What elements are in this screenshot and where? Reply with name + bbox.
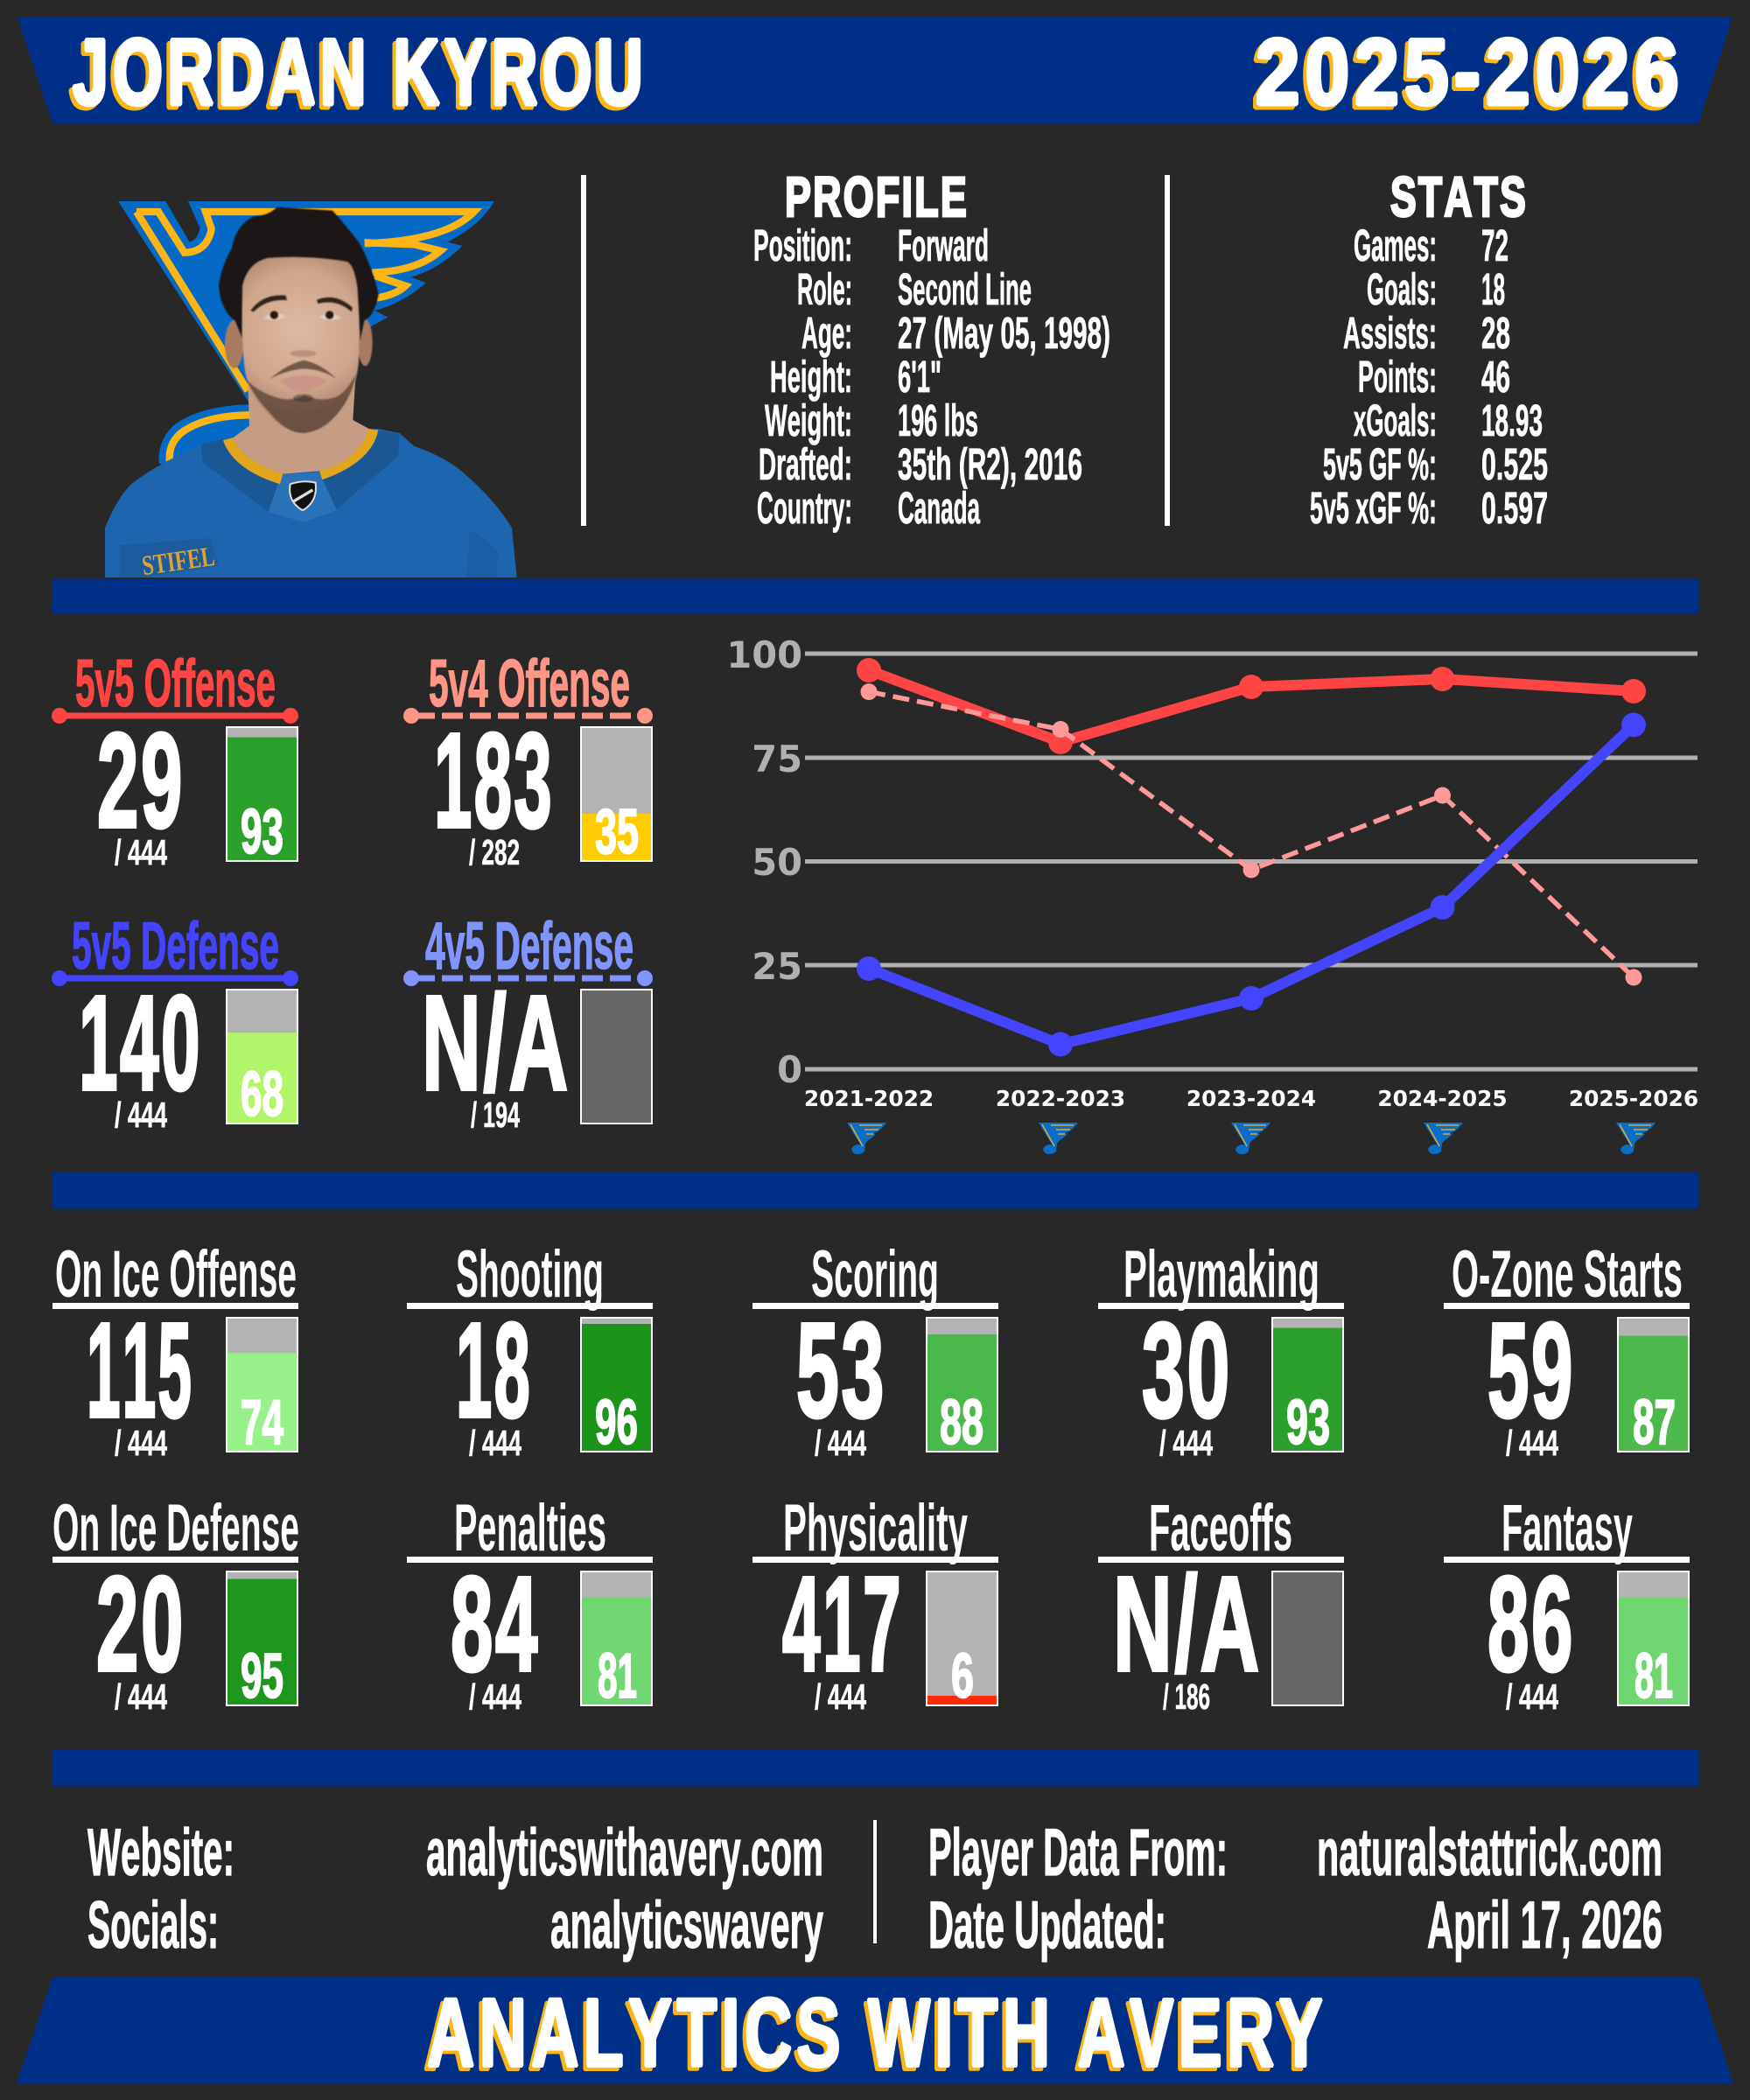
percentile bar: 81 <box>1634 1642 1673 1712</box>
grid lines <box>805 654 1698 1069</box>
x axis labels: 2024-2025 <box>1377 1086 1508 1111</box>
panel: scoring <box>752 1237 998 1463</box>
profile values: Second Line <box>898 264 1032 314</box>
stats labels <box>1310 220 1437 533</box>
neck <box>234 374 369 474</box>
footer info right: Date Updated: <box>928 1888 1166 1963</box>
season: 2025-2026 <box>1256 19 1684 124</box>
panel: stats <box>1310 165 1548 533</box>
percentile bar: 6 <box>951 1642 974 1712</box>
rank total: / 444 <box>815 1423 866 1463</box>
series: 5v5 offense <box>857 658 1646 754</box>
rank: 183 <box>434 705 554 856</box>
panel: penalties <box>407 1491 653 1717</box>
rank: 29 <box>97 705 185 856</box>
panel: fantasy <box>1444 1491 1690 1717</box>
underline <box>1444 1557 1690 1563</box>
profile labels: Age: <box>802 308 852 358</box>
divider <box>581 175 586 526</box>
icon: team logo 2025-2026 <box>1616 1123 1656 1154</box>
stats values: 72 <box>1481 220 1508 270</box>
stats values: 0.525 <box>1481 439 1548 489</box>
title: 5v5 Defense <box>72 909 279 984</box>
divider <box>1165 175 1170 526</box>
footer divider <box>873 1820 877 1943</box>
header banner <box>18 18 1732 128</box>
panel: shooting: 18 <box>456 1295 532 1446</box>
percentile bar: 95 <box>241 1642 284 1712</box>
profile values <box>898 220 1110 533</box>
icon: team logo 2023-2024 <box>1231 1123 1270 1154</box>
percentile bar <box>227 727 298 867</box>
profile values: 27 (May 05, 1998) <box>898 308 1110 358</box>
percentile bar: 87 <box>1633 1388 1676 1458</box>
footer info left: analyticswavery <box>550 1888 823 1963</box>
stats values: 18 <box>1481 264 1505 314</box>
underline <box>52 1303 298 1309</box>
underline <box>1098 1303 1344 1309</box>
brand name: ANALYTICS WITH AVERY <box>424 1983 1324 2090</box>
league shield <box>290 481 316 510</box>
section band <box>52 1172 1698 1208</box>
footer info right: Player Data From: <box>928 1816 1228 1890</box>
series: 5v5 defense <box>857 712 1646 1057</box>
y axis labels: 100 <box>726 634 802 676</box>
rank total: / 282 <box>469 832 520 872</box>
panel: on ice offense <box>52 1237 298 1463</box>
head <box>219 207 379 433</box>
footer info right <box>928 1816 1662 1963</box>
title: Scoring <box>811 1237 939 1312</box>
underline <box>752 1557 998 1563</box>
rank total: / 444 <box>815 1676 866 1717</box>
underline <box>752 1303 998 1309</box>
section band <box>52 578 1698 613</box>
series: 5v4 offense <box>861 683 1642 985</box>
title: 5v5 Offense <box>75 647 276 721</box>
percentile bar: 93 <box>1286 1388 1330 1458</box>
x axis labels: 2022-2023 <box>996 1086 1125 1111</box>
title: 5v4 Offense <box>429 647 630 721</box>
beard <box>247 374 356 433</box>
title: On Ice Offense <box>55 1237 297 1312</box>
hair <box>219 207 379 341</box>
rank total: / 444 <box>1506 1676 1558 1717</box>
rank: 84 <box>451 1549 540 1699</box>
dashed line with end dots <box>403 708 653 724</box>
jersey <box>105 429 517 578</box>
profile values: Canada <box>898 483 980 533</box>
x axis labels: 2025-2026 <box>1569 1086 1698 1111</box>
line with end dots <box>52 970 298 986</box>
rank: 20 <box>96 1549 186 1699</box>
line with end dots <box>52 708 298 724</box>
profile labels: Drafted: <box>759 439 852 489</box>
underline <box>52 1557 298 1563</box>
percentile bar: 81 <box>598 1642 637 1712</box>
percentile bar <box>927 1572 998 1712</box>
stats labels: 5v5 GF %: <box>1323 439 1437 489</box>
player name <box>69 19 648 128</box>
percentile bar: 68 <box>241 1060 284 1130</box>
rank total: / 444 <box>1506 1423 1558 1463</box>
rank total: / 444 <box>115 1423 167 1463</box>
rank total: / 186 <box>1163 1676 1210 1717</box>
y axis labels: 50 <box>752 841 802 884</box>
profile labels: Height: <box>770 352 852 402</box>
percentile bar <box>1618 1318 1689 1458</box>
player name: JORDAN KYROU <box>69 23 644 128</box>
footer info left: Socials: <box>88 1888 219 1963</box>
stats values: 0.597 <box>1481 483 1548 533</box>
y axis labels: 0 <box>777 1048 802 1091</box>
panel: 5v5 defense <box>52 909 298 1135</box>
profile values: 6'1" <box>898 352 942 402</box>
rank: 417 <box>782 1549 903 1699</box>
percentile bar: 88 <box>940 1388 984 1458</box>
y axis labels: 25 <box>752 945 802 988</box>
eyes <box>264 313 341 320</box>
stats values: 18.93 <box>1481 396 1543 445</box>
footer info left: analyticswithavery.com <box>426 1816 823 1890</box>
rank: 86 <box>1488 1549 1575 1699</box>
dashed line with end dots <box>403 970 653 986</box>
title: 4v5 Defense <box>425 909 634 984</box>
underline <box>1098 1557 1344 1563</box>
percentile bar <box>227 1572 298 1712</box>
panel: o-zone starts <box>1444 1237 1690 1463</box>
collar panels <box>201 439 282 512</box>
stats labels: 5v5 xGF %: <box>1310 483 1437 533</box>
percentile bar: 35 <box>595 797 639 867</box>
icon: team logo 2024-2025 <box>1424 1123 1463 1154</box>
stats labels: Goals: <box>1367 264 1437 314</box>
percentile bar <box>227 990 298 1130</box>
brows <box>250 295 353 312</box>
profile values: Forward <box>898 220 989 270</box>
panel: playmaking <box>1098 1237 1344 1463</box>
panel: physicality <box>752 1491 998 1717</box>
profile values: 35th (R2), 2016 <box>898 439 1082 489</box>
brand name: ANALYTICS WITH AVERY <box>427 1979 1327 2087</box>
title: On Ice Defense <box>52 1491 299 1565</box>
rank total: / 444 <box>115 1095 167 1135</box>
line chart <box>726 634 1698 1154</box>
percentile bar <box>1272 1572 1343 1705</box>
percentile bar <box>581 1572 652 1712</box>
rank: 59 <box>1488 1295 1575 1446</box>
section band <box>52 1750 1698 1786</box>
profile labels: Weight: <box>765 396 852 445</box>
profile labels <box>753 220 852 533</box>
profile labels: Position: <box>753 220 852 270</box>
sponsor patch: STIFEL <box>140 540 216 581</box>
y axis labels: 75 <box>752 738 802 780</box>
footer banner <box>17 1978 1733 2090</box>
title: Fantasy <box>1502 1491 1633 1565</box>
rank total: / 444 <box>115 832 167 872</box>
rank: 30 <box>1142 1295 1232 1446</box>
underline <box>1444 1303 1690 1309</box>
player photo <box>105 207 517 581</box>
team logo large <box>118 201 494 464</box>
collar trim <box>223 429 378 484</box>
rank total: / 444 <box>469 1676 522 1717</box>
percentile bar: 93 <box>241 797 284 867</box>
panel: profile: Role: <box>797 264 852 314</box>
percentile bar <box>927 1318 998 1458</box>
rank total: / 444 <box>115 1676 167 1717</box>
stats values <box>1481 220 1548 533</box>
rank: N/A <box>422 968 570 1118</box>
title: Physicality <box>783 1491 968 1565</box>
player name: JORDAN KYROU <box>73 19 648 124</box>
percentile bar <box>1618 1572 1689 1712</box>
title: Shooting <box>456 1237 604 1312</box>
x axis labels: 2021-2022 <box>804 1086 934 1111</box>
footer info left: Website: <box>88 1816 234 1890</box>
underline <box>407 1557 653 1563</box>
percentile bar <box>581 727 652 867</box>
brand name <box>424 1979 1327 2090</box>
percentile bar <box>581 1318 652 1458</box>
stats labels: Points: <box>1358 352 1437 402</box>
percentile bar: 74 <box>241 1388 284 1458</box>
stats labels: Assists: <box>1343 308 1437 358</box>
profile values: 196 lbs <box>898 396 978 445</box>
stats labels: Games: <box>1354 220 1437 270</box>
title: Playmaking <box>1124 1237 1320 1312</box>
rank total: / 194 <box>471 1095 520 1135</box>
title: Penalties <box>454 1491 606 1565</box>
profile heading: PROFILE <box>785 165 969 228</box>
title: Faceoffs <box>1149 1491 1292 1565</box>
x axis labels: 2023-2024 <box>1186 1086 1316 1111</box>
rank: 140 <box>79 968 202 1118</box>
panel: faceoffs <box>1098 1491 1344 1717</box>
x axis labels <box>804 1086 1698 1111</box>
panel: 5v5 offense <box>52 647 298 872</box>
panel: on ice offense: 115 <box>87 1295 193 1446</box>
panel: shooting <box>407 1237 653 1463</box>
rank total: / 444 <box>1159 1423 1213 1463</box>
percentile bar <box>227 1318 298 1458</box>
panel: 4v5 defense <box>403 909 653 1135</box>
rank: 53 <box>796 1295 886 1446</box>
percentile bar: 96 <box>595 1388 638 1458</box>
panel: on ice defense <box>52 1491 299 1717</box>
underline <box>407 1303 653 1309</box>
icon: team logo 2021-2022 <box>847 1123 886 1154</box>
stats labels: xGoals: <box>1354 396 1437 445</box>
rank: N/A <box>1113 1549 1262 1699</box>
stats heading: STATS <box>1390 165 1528 228</box>
profile labels: Country: <box>757 483 852 533</box>
panel: 5v4 offense <box>403 647 653 872</box>
percentile bar <box>581 990 652 1124</box>
panel: profile <box>753 165 1110 533</box>
percentile bar <box>1272 1318 1343 1458</box>
stats values: 28 <box>1481 308 1510 358</box>
sponsor patch <box>120 531 499 581</box>
rank total: / 444 <box>469 1423 522 1463</box>
stats values: 46 <box>1481 352 1510 402</box>
footer info left <box>88 1816 823 1963</box>
y axis labels <box>726 634 802 1091</box>
icon: team logo 2022-2023 <box>1039 1123 1078 1154</box>
season: 2025-2026 <box>1252 23 1681 128</box>
